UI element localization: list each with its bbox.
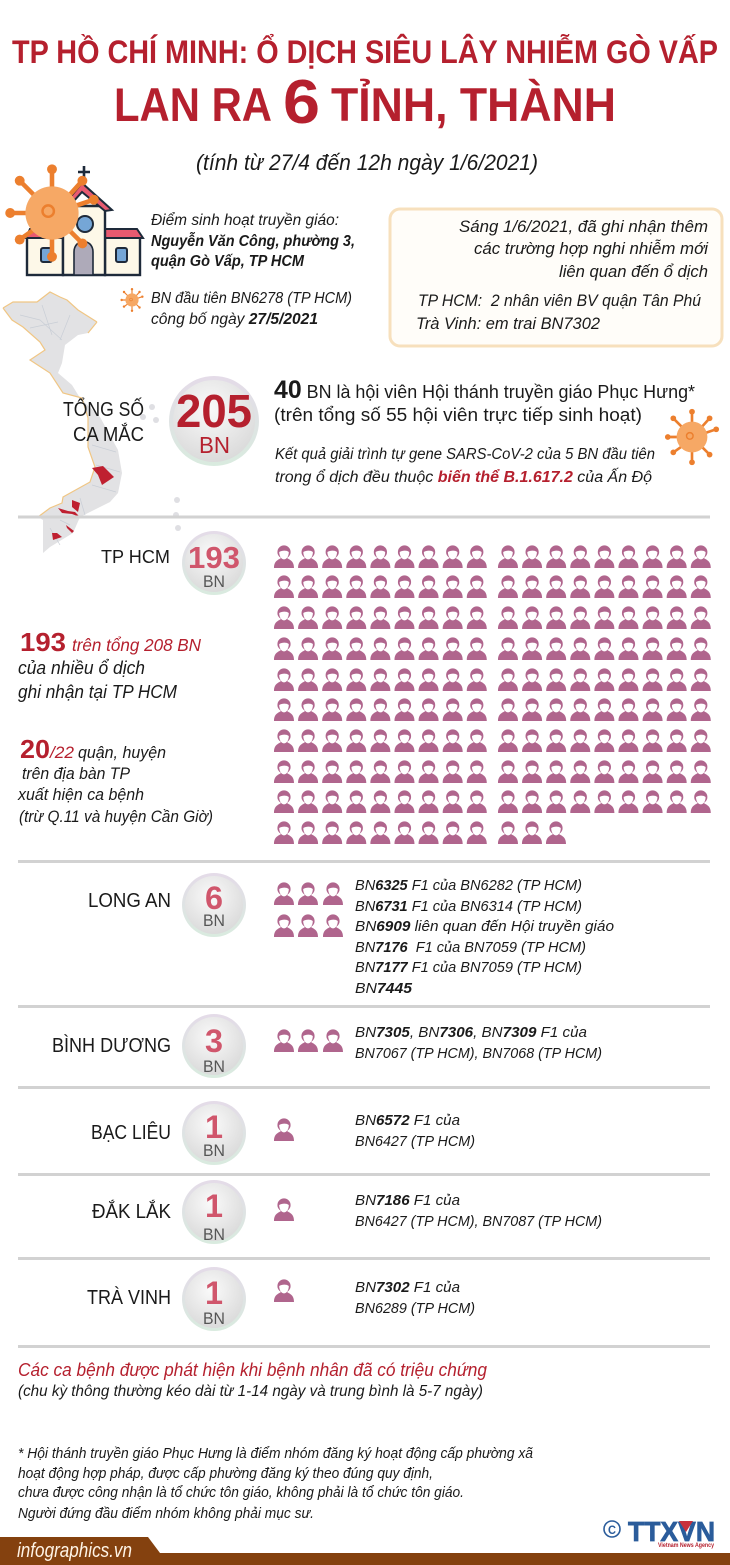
first patient text: công bố ngày 27/5/2021 (151, 311, 318, 328)
badge: 1: BN (203, 1225, 225, 1244)
text: HCM cases share (18, 627, 201, 702)
total cases details: 40 BN là hội viên Hội thánh truyền giáo Phục Hưng* (274, 376, 695, 404)
total cases badge: BN (199, 432, 230, 458)
case list: BN6289 (TP HCM) (355, 1300, 475, 1317)
badge: 1 (182, 1180, 246, 1244)
section: Bình Dương: BÌNH DƯƠNG (52, 1034, 171, 1057)
text: districts affected: quận, huyện (78, 743, 166, 762)
section: Long An: LONG AN (88, 890, 171, 912)
location text: Điểm sinh hoạt truyền giáo: (151, 212, 339, 229)
case list: BN6909 liên quan đến Hội truyền giáo (355, 918, 614, 935)
badge: 193: BN (203, 572, 225, 591)
title (12, 34, 718, 137)
case list: BN7445 (355, 980, 413, 997)
logo: TTXVN: C (608, 1523, 616, 1537)
badge: 3: BN (203, 1057, 225, 1076)
badge: 1 (182, 1101, 246, 1165)
pictogram: 1 patient (274, 1279, 294, 1302)
footnote: hoạt động hợp pháp, được cấp phường đăng ký theo đúng quy định, (18, 1466, 433, 1482)
panel: new suspected cases: liên quan đến ổ dịch (559, 263, 708, 281)
total cases badge (169, 376, 259, 466)
section: TP HCM: TP HCM (101, 547, 170, 567)
title: TỈNH, THÀNH (331, 78, 616, 131)
title: 6 (283, 68, 320, 137)
total cases details: (trên tổng số 55 hội viên trực tiếp sinh hoạt) (274, 405, 642, 425)
section: Long An (88, 873, 614, 997)
badge: 6: 6 (205, 880, 223, 916)
footnote: chưa được công nhận là tổ chức tôn giáo, không phải là tổ chức tôn giáo. (18, 1485, 464, 1501)
badge: 1 (182, 1267, 246, 1331)
badge: 1: 1 (205, 1188, 223, 1224)
case list: BN6325 F1 của BN6282 (TP HCM) (355, 877, 582, 894)
map of Vietnam (3, 292, 181, 557)
total cases details: Kết quả giải trình tự gene SARS-CoV-2 của 5 BN đầu tiên (275, 446, 655, 463)
icon: virus (665, 409, 719, 465)
badge: 1: BN (203, 1141, 225, 1160)
section: Trà Vinh (87, 1267, 475, 1331)
total cases badge: 205 (176, 385, 252, 437)
text: HCM cases share: 193 (20, 627, 66, 657)
location text: Nguyễn Văn Công, phường 3, (151, 233, 355, 250)
footnote: Người đứng đầu điểm nhóm không phải mục sư. (18, 1506, 314, 1522)
text: districts affected (17, 734, 213, 826)
badge: 1: 1 (205, 1109, 223, 1145)
footnote (18, 1446, 533, 1522)
badge: 1: 1 (205, 1275, 223, 1311)
logo: TTXVN: TTXVN (628, 1516, 715, 1547)
text: HCM cases share: của nhiều ổ dịch (18, 658, 145, 678)
total cases label: TỔNG SỐ (63, 397, 144, 421)
badge: 3: 3 (205, 1023, 223, 1059)
text: HCM cases share: ghi nhận tại TP HCM (18, 682, 177, 702)
case list: BN7302 F1 của (355, 1279, 460, 1296)
total cases label (63, 397, 144, 446)
first patient text: BN đầu tiên BN6278 (TP HCM) (151, 290, 352, 307)
case list: BN7067 (TP HCM), BN7068 (TP HCM) (355, 1045, 602, 1062)
section: Bình Dương (52, 1014, 602, 1078)
panel: new suspected cases: Sáng 1/6/2021, đã ghi nhận thêm (459, 218, 708, 236)
panel: new suspected cases (390, 209, 722, 346)
section: Đắk Lắk: ĐẮK LẮK (92, 1199, 172, 1223)
case list: BN7176 F1 của BN7059 (TP HCM) (355, 939, 586, 956)
case list (355, 877, 614, 997)
pictogram: 1 patient (274, 1198, 294, 1221)
badge: 6 (182, 873, 246, 937)
subtitle: time range: (tính từ 27/4 đến 12h ngày 1/6/2021) (196, 150, 538, 175)
badge: 3 (182, 1014, 246, 1078)
symptom note: Các ca bệnh được phát hiện khi bệnh nhân đã có triệu chứng (18, 1360, 487, 1380)
icon: small virus (120, 288, 144, 312)
pictogram: 6 patients (274, 882, 343, 937)
case list: BN7305, BN7306, BN7309 F1 của (355, 1024, 587, 1041)
section: Bạc Liêu: BẠC LIÊU (91, 1121, 171, 1144)
logo: TTXVN: Vietnam News Agency (658, 1542, 714, 1549)
symptom note: (chu kỳ thông thường kéo dài từ 1-14 ngày và trung bình là 5-7 ngày) (18, 1383, 483, 1400)
case list (355, 1112, 475, 1150)
case list (355, 1279, 475, 1317)
first patient text (151, 290, 352, 328)
total cases label: CA MẮC (73, 422, 144, 446)
case list (355, 1024, 602, 1062)
case list (355, 1192, 602, 1230)
section: Trà Vinh: TRÀ VINH (87, 1286, 171, 1309)
pictogram: 193 patients (274, 545, 711, 844)
location text: quận Gò Vấp, TP HCM (151, 253, 305, 270)
case list: BN6731 F1 của BN6314 (TP HCM) (355, 898, 582, 915)
footnote: * Hội thánh truyền giáo Phục Hưng là điểm nhóm đăng ký hoạt động cấp phường xã (18, 1446, 533, 1462)
text: districts affected: xuất hiện ca bệnh (17, 785, 144, 804)
panel: new suspected cases: TP HCM: 2 nhân viên BV quận Tân Phú (418, 292, 701, 310)
location text (151, 212, 355, 270)
text: districts affected: trên địa bàn TP (22, 764, 131, 783)
footer band (0, 1537, 730, 1565)
section: Đắk Lắk (92, 1180, 602, 1244)
case list: BN6427 (TP HCM), BN7087 (TP HCM) (355, 1213, 602, 1230)
pictogram: 1 patient (274, 1118, 294, 1141)
badge: 193 (182, 531, 246, 595)
case list: BN7177 F1 của BN7059 (TP HCM) (355, 959, 582, 976)
text: districts affected: (trừ Q.11 và huyện Cần Giờ) (19, 807, 213, 826)
section: TP HCM (17, 531, 711, 844)
title: LAN RA (114, 78, 272, 131)
panel: new suspected cases: Trà Vinh: em trai BN7302 (416, 315, 600, 333)
pictogram: 3 patients (274, 1029, 343, 1052)
case list: BN7186 F1 của (355, 1192, 460, 1209)
footer band: infographics.vn (17, 1540, 132, 1562)
text: districts affected: 20 (20, 734, 50, 764)
badge: 6: BN (203, 911, 225, 930)
text: HCM cases share: trên tổng 208 BN (72, 635, 201, 655)
case list: BN6427 (TP HCM) (355, 1133, 475, 1150)
badge: 1: BN (203, 1309, 225, 1328)
symptom note (18, 1360, 487, 1400)
provinces highlighted in red (52, 466, 114, 540)
badge: 193: 193 (188, 540, 240, 575)
panel: new suspected cases: các trường hợp nghi nhiễm mới (474, 239, 709, 258)
icon: church with virus (5, 164, 143, 275)
text: districts affected: /22 (49, 743, 75, 762)
total cases details: trong ổ dịch đều thuộc biến thể B.1.617.2 của Ấn Độ (275, 468, 652, 486)
case list: BN6572 F1 của (355, 1112, 460, 1129)
section: Bạc Liêu (91, 1101, 475, 1165)
total cases details (274, 376, 695, 486)
